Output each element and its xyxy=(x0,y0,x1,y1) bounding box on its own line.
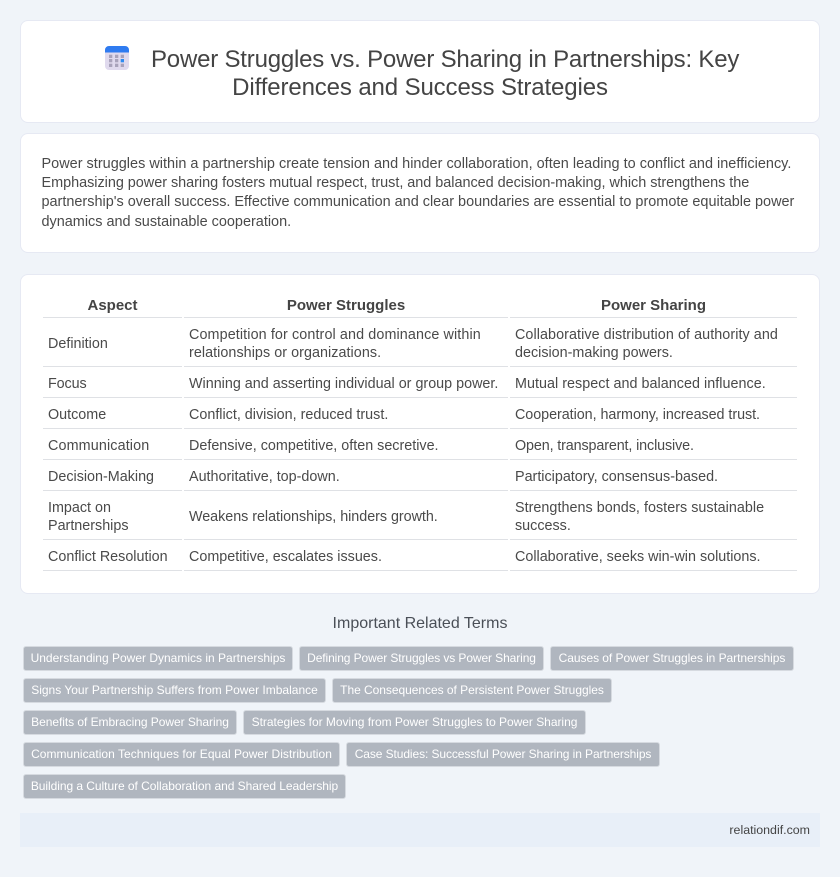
comparison table: success. xyxy=(515,518,571,534)
intro card xyxy=(20,133,820,253)
comparison table: Partnerships xyxy=(48,518,129,534)
comparison table: Conflict Resolution xyxy=(48,549,168,565)
related terms tags: Benefits of Embracing Power Sharing xyxy=(31,715,229,729)
comparison table: Winning and asserting individual or group power. xyxy=(189,376,498,392)
related terms tags: Understanding Power Dynamics in Partnerships xyxy=(31,651,285,665)
header card xyxy=(20,20,820,123)
comparison table: Collaborative distribution of authority and xyxy=(515,327,778,343)
intro paragraph xyxy=(42,156,794,230)
icon: calendar xyxy=(105,46,129,70)
related terms heading: Important Related Terms xyxy=(333,615,507,632)
related terms tags: The Consequences of Persistent Power Struggles xyxy=(340,683,604,697)
comparison table: Competition for control and dominance within xyxy=(189,327,481,343)
related terms tags: Case Studies: Successful Power Sharing in Partnerships xyxy=(355,747,651,761)
comparison table: Open, transparent, inclusive. xyxy=(515,438,694,454)
comparison table: Collaborative, seeks win-win solutions. xyxy=(515,549,761,565)
comparison table: Power Struggles xyxy=(287,297,405,314)
comparison table: Power Sharing xyxy=(601,297,706,314)
comparison table: relationships or organizations. xyxy=(189,345,381,361)
intro paragraph: Power struggles within a partnership create tension and hinder collaboration, often leading to conflict and inefficiency. xyxy=(42,156,791,172)
comparison table: Defensive, competitive, often secretive. xyxy=(189,438,439,454)
comparison table: Weakens relationships, hinders growth. xyxy=(189,509,438,525)
footer source: relationdif.com xyxy=(729,823,810,837)
related terms tags: Causes of Power Struggles in Partnerships xyxy=(559,651,785,665)
comparison table: decision-making powers. xyxy=(515,345,673,361)
comparison table: Aspect xyxy=(87,297,138,314)
comparison table: Participatory, consensus-based. xyxy=(515,469,718,485)
comparison table: Impact on xyxy=(48,500,111,516)
title: Power Struggles vs. Power Sharing in Partnerships: Key xyxy=(151,46,739,72)
comparison table: Definition xyxy=(48,336,108,352)
comparison table: Outcome xyxy=(48,407,106,423)
related terms tags: Building a Culture of Collaboration and Shared Leadership xyxy=(31,779,338,793)
intro paragraph: partnership's overall success. Effective communication and clear boundaries are essential to promote equitable power xyxy=(42,194,794,210)
comparison table: Strengthens bonds, fosters sustainable xyxy=(515,500,764,516)
title: Differences and Success Strategies xyxy=(232,74,608,101)
comparison table: Focus xyxy=(48,376,87,392)
intro paragraph: dynamics and sustainable cooperation. xyxy=(42,214,291,230)
comparison table: Competitive, escalates issues. xyxy=(189,549,382,565)
title xyxy=(151,46,740,101)
comparison table: Decision-Making xyxy=(48,469,154,485)
comparison table xyxy=(43,297,797,571)
related terms tags: Communication Techniques for Equal Power Distribution xyxy=(31,747,332,761)
comparison table: Conflict, division, reduced trust. xyxy=(189,407,388,423)
related terms tags: Signs Your Partnership Suffers from Power Imbalance xyxy=(31,683,318,697)
comparison table: Communication xyxy=(48,438,149,454)
intro paragraph: Emphasizing power sharing fosters mutual respect, trust, and balanced decision-making, which strengthens the xyxy=(42,175,749,191)
comparison table: Cooperation, harmony, increased trust. xyxy=(515,407,760,423)
related terms tags: Defining Power Struggles vs Power Sharing xyxy=(307,651,536,665)
footer bar xyxy=(20,813,820,847)
comparison table: Authoritative, top-down. xyxy=(189,469,340,485)
table card xyxy=(20,274,820,594)
related terms tags: Strategies for Moving from Power Struggles to Power Sharing xyxy=(252,715,577,729)
comparison table: Mutual respect and balanced influence. xyxy=(515,376,766,392)
